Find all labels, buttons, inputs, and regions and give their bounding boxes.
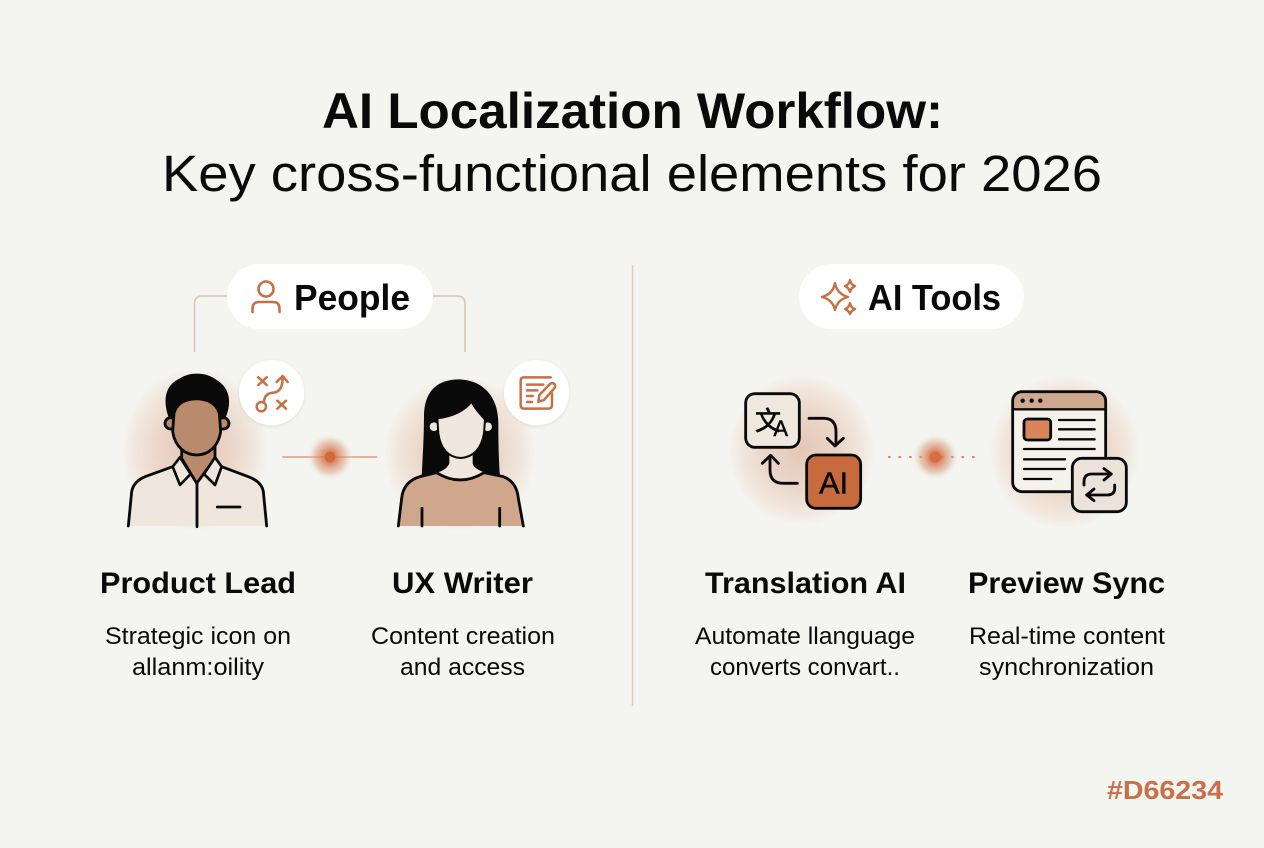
pill: People (227, 264, 433, 329)
pill: AI Tools (799, 264, 1024, 329)
pill: AI Tools: AI Tools (868, 277, 1001, 318)
people illustrations (120, 360, 569, 533)
badge: writing icon (504, 360, 569, 425)
card text: translation ai (695, 567, 915, 681)
divider (632, 265, 634, 706)
card text: preview sync: Preview Sync (968, 567, 1165, 600)
icon: sparkles (822, 280, 855, 314)
card text: translation ai: Translation AI (705, 567, 906, 600)
title (162, 83, 1102, 202)
card text: ux writer (371, 567, 555, 681)
connector: tools link (889, 433, 982, 481)
icon: translation ai (727, 373, 877, 527)
icon: translation ai: A (773, 416, 788, 441)
icon: preview sync (988, 373, 1142, 531)
connector: people link (282, 433, 377, 481)
card text: translation ai: converts convart.. (710, 654, 900, 681)
card text: product lead: allanm:oility (132, 654, 264, 681)
icon: translation ai: AI (819, 467, 848, 501)
title: AI Localization Workflow: (322, 83, 943, 139)
card text: translation ai: Automate llanguage (695, 623, 915, 650)
colour code label: #D66234 (1107, 775, 1224, 805)
icon: translation ai: 文 (755, 406, 781, 436)
figure: product lead (120, 367, 270, 533)
card text: ux writer: Content creation (371, 623, 555, 650)
card text: preview sync (968, 567, 1165, 681)
title: Key cross-functional elements for 2026 (162, 145, 1102, 202)
pill: People: People (294, 277, 410, 318)
card text: product lead (100, 567, 296, 681)
card text: product lead: Strategic icon on (105, 623, 291, 650)
card text: ux writer: UX Writer (392, 567, 533, 600)
figure: ux writer (382, 373, 538, 533)
icon: person (252, 282, 280, 312)
AI tool illustrations (727, 373, 1142, 531)
card text: preview sync: synchronization (979, 654, 1154, 681)
card text: product lead: Product Lead (100, 567, 296, 600)
badge: strategy icon (239, 360, 304, 425)
connector: people bracket (194, 296, 465, 352)
card text: ux writer: and access (400, 654, 525, 681)
card text: preview sync: Real-time content (969, 623, 1165, 650)
